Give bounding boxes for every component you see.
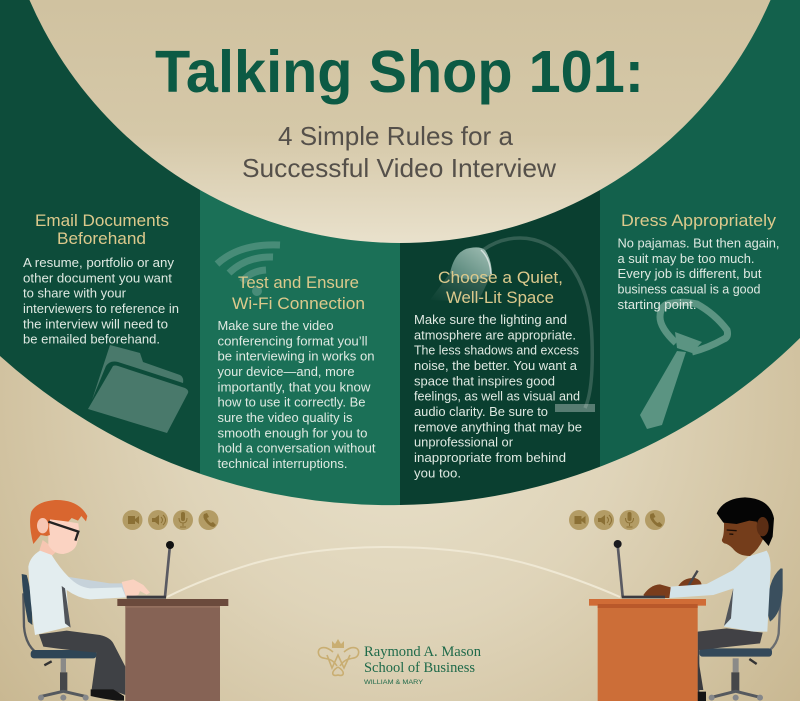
title arch: [0, 0, 800, 243]
panel: quiet well-lit space: Well-Lit Space: [446, 289, 554, 307]
title: Talking Shop 101:: [155, 39, 644, 105]
far hand and pen: [678, 571, 702, 586]
icon: necktie: [640, 302, 728, 429]
head: [717, 497, 774, 556]
panel: wi-fi connection: be interviewing in works on: [218, 349, 374, 364]
panel: quiet well-lit space: Choose a Quiet,: [438, 269, 563, 287]
panel: quiet well-lit space: audio clarity. Be sure to: [414, 404, 548, 419]
icon: desk lamp: [430, 238, 595, 412]
panel: quiet well-lit space: feelings, as well as visual and: [414, 389, 580, 404]
panel: email documents: Email Documents: [35, 212, 169, 230]
panel: dress appropriately: Every job is different, but: [618, 266, 762, 281]
panel: email documents: Beforehand: [57, 230, 146, 248]
panel: email documents: be emailed beforehand.: [23, 332, 160, 347]
figure: left interviewer at desk: [22, 500, 228, 701]
panel: wi-fi connection: [218, 274, 376, 471]
panel: dress appropriately: Dress Appropriately: [621, 212, 777, 230]
shirt and arm: [669, 551, 771, 632]
trousers and shoes: [39, 631, 125, 701]
panel: quiet well-lit space: remove anything that may be: [414, 419, 582, 434]
figure: right interviewer at desk: [589, 497, 783, 701]
subtitle: 4 Simple Rules for a: [278, 121, 514, 151]
hand: [122, 579, 150, 597]
panel: wi-fi connection: sure the video quality is: [218, 410, 353, 425]
panel: email documents: other document you want: [23, 270, 172, 285]
trousers: [698, 628, 763, 701]
neck: [39, 540, 57, 556]
desk: [117, 599, 228, 701]
connection arc: [167, 547, 620, 597]
panel: wi-fi connection: how to use it correctly. Be: [218, 395, 366, 410]
logo: school name: WILLIAM & MARY: [364, 679, 424, 686]
laptop: [127, 541, 174, 599]
panel: wi-fi connection: importantly, that you know: [218, 379, 371, 394]
chair: [699, 568, 783, 701]
hand: [643, 584, 671, 598]
icon: wifi: [217, 245, 280, 296]
panel: quiet well-lit space: noise, the better. You want a: [414, 358, 578, 373]
panel: email documents: the interview will need to: [23, 316, 168, 331]
panel: dress appropriately: starting point.: [618, 297, 696, 312]
panel: wi-fi connection: hold a conversation without: [218, 441, 376, 456]
head: [30, 500, 87, 554]
panel: dress appropriately: No pajamas. But then again,: [618, 236, 780, 250]
panel: quiet well-lit space: you too.: [414, 465, 461, 480]
panel: dress appropriately: business casual is a good: [618, 282, 760, 296]
panel: quiet well-lit space: space that inspires good: [414, 373, 555, 388]
panel: dress appropriately: [618, 212, 780, 312]
panel: quiet well-lit space: [414, 269, 582, 480]
panel: wi-fi connection: Test and Ensure: [238, 274, 359, 292]
shirt and arm: [28, 551, 126, 635]
panel: dress appropriately: a suit may be too much.: [618, 251, 754, 266]
subtitle: Successful Video Interview: [242, 153, 556, 183]
panel: email documents: A resume, portfolio or any: [23, 255, 174, 270]
chair: [22, 574, 97, 701]
panel: wi-fi connection: technical interruptions.: [218, 456, 348, 471]
panel: email documents: [23, 212, 179, 347]
panel: email documents: interviewers to reference in: [23, 301, 179, 316]
panel: email documents: to share with your: [23, 286, 127, 301]
panel: quiet well-lit space: Make sure the lighting and: [414, 312, 567, 327]
desk: [589, 599, 706, 701]
panel: wi-fi connection: smooth enough for you to: [218, 425, 368, 440]
logo: school name: [364, 644, 482, 686]
icon: folder: [88, 345, 188, 433]
icons: right call controls: [569, 510, 665, 530]
panel: wi-fi connection: Make sure the video: [218, 318, 334, 333]
logo: school name: Raymond A. Mason: [364, 644, 482, 660]
logo: monogram: [318, 639, 359, 675]
panel: quiet well-lit space: The less shadows and excess: [414, 343, 579, 358]
panel: wi-fi connection: conferencing format you’ll: [218, 333, 368, 348]
panel: quiet well-lit space: unprofessional or: [414, 435, 514, 450]
logo: school name: School of Business: [364, 660, 475, 676]
panel: wi-fi connection: Wi-Fi Connection: [232, 295, 365, 313]
laptop: [614, 540, 665, 598]
icons: left call controls: [122, 510, 218, 530]
panel: wi-fi connection: your device—and, more: [218, 364, 354, 379]
panel: quiet well-lit space: atmosphere are appropriate.: [414, 327, 576, 342]
panel: quiet well-lit space: inappropriate from behind: [414, 450, 566, 465]
subtitle: [242, 121, 556, 183]
panel: four green columns: [0, 0, 800, 520]
